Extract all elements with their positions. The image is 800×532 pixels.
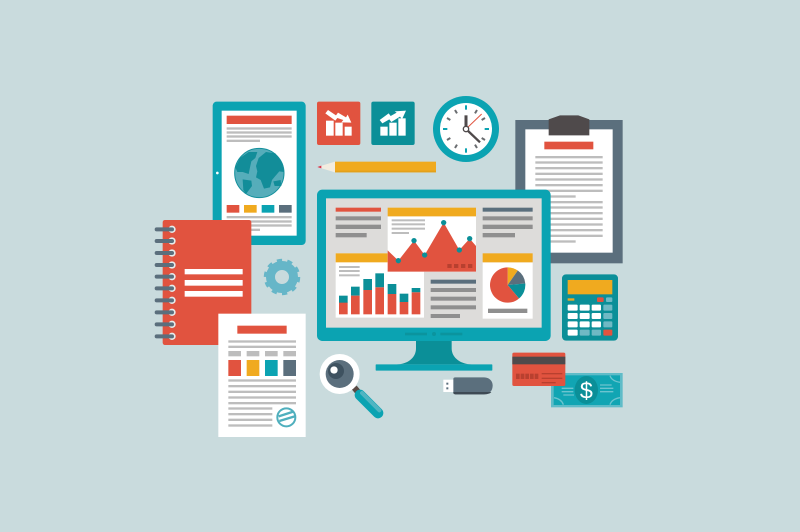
icon: calculator <box>562 274 618 341</box>
icon: falling chart tile <box>317 102 360 145</box>
icon: gear <box>266 261 298 293</box>
tablet with globe <box>213 102 306 245</box>
text block right <box>483 208 533 237</box>
monitor stand <box>397 341 472 364</box>
icon: spiral notebook <box>157 220 251 345</box>
icon: banknote <box>551 373 623 407</box>
icon: pencil <box>317 162 436 172</box>
clipboard <box>515 115 623 263</box>
notebook rings <box>157 226 176 340</box>
report page <box>218 314 306 437</box>
dollar sign: $ <box>580 377 593 403</box>
icon: credit card <box>512 353 565 386</box>
icon: globe <box>235 148 284 198</box>
monitor dashboard <box>317 190 551 371</box>
icon: magnifying glass <box>320 354 379 413</box>
text block left <box>336 208 381 237</box>
stamp badge <box>277 408 295 426</box>
icon: rising chart tile <box>371 102 415 145</box>
icon: clock <box>433 96 499 162</box>
pie chart <box>483 253 533 319</box>
bar chart <box>336 253 424 318</box>
area chart <box>388 208 476 272</box>
text block centre <box>431 280 476 318</box>
icon: USB drive <box>443 377 493 394</box>
